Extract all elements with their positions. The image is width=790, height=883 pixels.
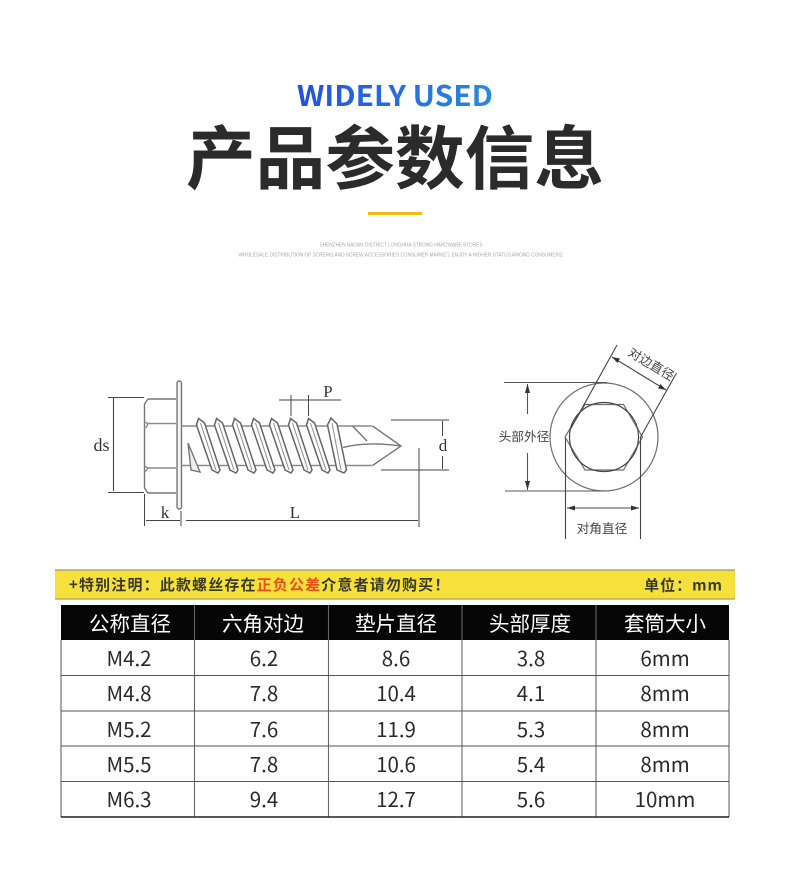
title: 产品参数信息 <box>186 103 604 203</box>
small caption text: WHOLESALE DISTRIBUTION OF SCREWS AND SCREW ACCESSORIES CONSUMER MARKET, ENJOY A HIGHER STATUS AMONG CONSUMERS. <box>238 252 564 258</box>
dimension: 对角直径: 对角直径 <box>577 518 628 537</box>
spec table <box>61 605 729 817</box>
dimension: k: k <box>161 503 170 522</box>
row: M4.2 <box>106 642 690 672</box>
dimension: 头部外径: 头部外径 <box>499 426 550 445</box>
subtitle: WIDELY USED: WIDELY USED <box>297 74 493 115</box>
dimension: L <box>186 448 419 527</box>
hexagon <box>565 404 642 470</box>
dimension: ds: ds <box>93 435 110 455</box>
row: M4.8 <box>106 677 690 707</box>
row: M4.2: 6mm <box>640 642 690 672</box>
yellow accent bar <box>368 212 422 215</box>
row: M4.8: 8mm <box>640 677 690 707</box>
table header: 六角对边 <box>222 607 304 637</box>
small caption text <box>238 242 564 258</box>
inner circle <box>570 402 638 472</box>
row: M4.2: 8.6 <box>382 642 410 672</box>
dimension: 对边直径: 对边直径 <box>625 342 679 385</box>
row: M4.2: 6.2 <box>250 642 278 672</box>
row: M4.8: 7.8 <box>250 677 278 707</box>
row: M4.2: 3.8 <box>517 642 545 672</box>
unit text: 单位：mm <box>644 574 723 596</box>
dimension: d: d <box>439 436 448 455</box>
washer circle <box>550 383 658 491</box>
row: M5.2: M5.2 <box>106 713 152 743</box>
screw shank <box>182 426 372 466</box>
notice text: +特别注明：此款螺丝存在正负公差介意者请勿购买！ <box>69 574 450 595</box>
dimension: ds <box>93 398 144 492</box>
dimension: d <box>381 420 449 470</box>
dimension: k <box>144 494 181 526</box>
row: M5.5: 7.8 <box>250 748 278 778</box>
inner thread lines <box>200 423 341 470</box>
screw hex head <box>144 399 176 493</box>
table header: 头部厚度 <box>489 607 571 637</box>
row: M4.8: 4.1 <box>517 677 545 707</box>
row: M5.5: M5.5 <box>106 748 152 778</box>
row: M5.5: 8mm <box>640 748 690 778</box>
drill tip <box>343 426 401 466</box>
row: M4.8: 10.4 <box>376 677 416 707</box>
dimension: 对边直径 <box>570 342 679 438</box>
dimension: 头部外径 <box>499 382 607 491</box>
table header: 套筒大小 <box>624 607 706 637</box>
diagram: screw head top view <box>550 383 658 491</box>
row: M6.3: 10mm <box>635 783 695 813</box>
row: M4.2: M4.2 <box>106 642 152 672</box>
notice banner <box>55 570 735 599</box>
hex head facets <box>144 422 176 472</box>
small caption text: SHENZHEN BAOAN DISTRICT LONGHUA STRONG HARDWARE STORES <box>320 242 483 248</box>
row: M5.5: 10.6 <box>376 748 416 778</box>
table header: 公称直径 <box>89 607 171 637</box>
row: M5.2 <box>106 713 690 743</box>
row: M5.2: 8mm <box>640 713 690 743</box>
screw washer flange <box>177 381 182 509</box>
dimension: L: L <box>290 503 300 522</box>
screw threads <box>196 418 346 473</box>
table header: 垫片直径 <box>355 607 437 637</box>
row: M6.3 <box>106 783 695 813</box>
table grid <box>61 605 729 817</box>
row: M5.5 <box>106 748 690 778</box>
row: M5.5: 5.4 <box>517 748 545 778</box>
thread notch <box>188 443 200 472</box>
row: M5.2: 7.6 <box>250 713 278 743</box>
row: M6.3: 9.4 <box>250 783 278 813</box>
table header <box>61 605 729 640</box>
row: M6.3: M6.3 <box>106 783 152 813</box>
row: M4.8: M4.8 <box>106 677 152 707</box>
row: M5.2: 11.9 <box>376 713 416 743</box>
row: M5.2: 5.3 <box>517 713 545 743</box>
dimension: P: P <box>323 382 333 401</box>
dimension: P <box>279 382 341 416</box>
row: M6.3: 12.7 <box>376 783 416 813</box>
dimension: 对角直径 <box>566 438 640 539</box>
diagram: screw side view <box>144 381 401 509</box>
row: M6.3: 5.6 <box>517 783 545 813</box>
